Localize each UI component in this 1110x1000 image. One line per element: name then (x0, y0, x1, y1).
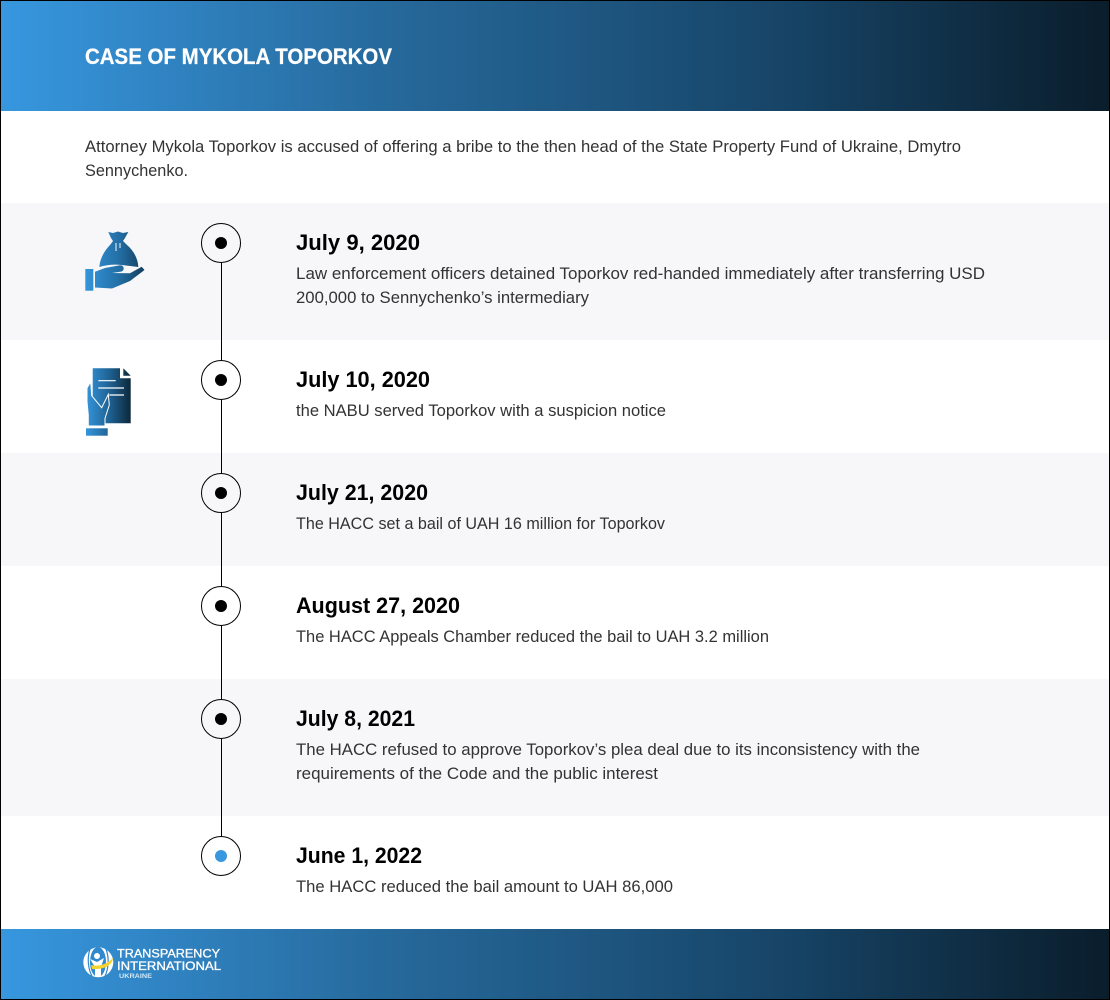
event: July 10, 2020: the NABU served Toporkov with a suspicion notice (296, 402, 666, 420)
marker: July 9, 2020 (202, 224, 240, 262)
event: August 27, 2020: The HACC Appeals Chamber reduced the bail to UAH 3.2 million (296, 628, 769, 646)
event: July 8, 2021: The HACC refused to approve Toporkov’s plea deal due to its inconsistency with the (296, 741, 920, 759)
timeline (202, 224, 240, 876)
logo: Transparency International Ukraine (83, 946, 221, 980)
event: July 8, 2021: July 8, 2021 (296, 706, 415, 731)
marker: June 1, 2022 (202, 836, 240, 876)
intro text (85, 138, 961, 180)
logo: Transparency International Ukraine: TRANSPARENCY (117, 946, 220, 960)
event: July 8, 2021: requirements of the Code and the public interest (296, 765, 658, 783)
event: August 27, 2020: August 27, 2020 (296, 593, 460, 618)
event: July 9, 2020: July 9, 2020 (296, 230, 420, 255)
row backgrounds (1, 203, 1109, 816)
footer banner (1, 929, 1109, 999)
marker: July 8, 2021 (202, 700, 240, 738)
title: CASE OF MYKOLA TOPORKOV (85, 44, 392, 69)
marker: July 10, 2020 (202, 360, 240, 400)
marker: July 21, 2020 (202, 474, 240, 512)
event: August 27, 2020 (296, 593, 769, 646)
header banner (1, 1, 1109, 111)
event: July 21, 2020: July 21, 2020 (296, 480, 428, 505)
logo: Transparency International Ukraine: UKRAINE (119, 973, 153, 980)
intro text: Sennychenko. (85, 162, 188, 180)
event: June 1, 2022: June 1, 2022 (296, 843, 422, 868)
event: July 8, 2021 (296, 706, 920, 783)
intro text: Attorney Mykola Toporkov is accused of offering a bribe to the then head of the State Property Fund of Ukraine, Dmytro (85, 138, 961, 156)
icon: hand holding document (86, 368, 131, 436)
event: July 9, 2020 (296, 230, 985, 307)
marker: August 27, 2020 (202, 586, 240, 626)
logo: Transparency International Ukraine: INTERNATIONAL (117, 959, 221, 973)
event: July 9, 2020: Law enforcement officers detained Toporkov red-handed immediately after transferring USD (296, 265, 985, 283)
event: June 1, 2022: The HACC reduced the bail amount to UAH 86,000 (296, 878, 673, 896)
event: July 10, 2020: July 10, 2020 (296, 367, 430, 392)
event: July 21, 2020 (296, 480, 666, 533)
icon: hand holding money bag (85, 232, 144, 291)
event: July 10, 2020 (296, 367, 666, 420)
event: July 21, 2020: The HACC set a bail of UAH 16 million for Toporkov (296, 515, 666, 533)
event: June 1, 2022 (296, 843, 673, 896)
event: July 9, 2020: 200,000 to Sennychenko’s intermediary (296, 289, 590, 307)
